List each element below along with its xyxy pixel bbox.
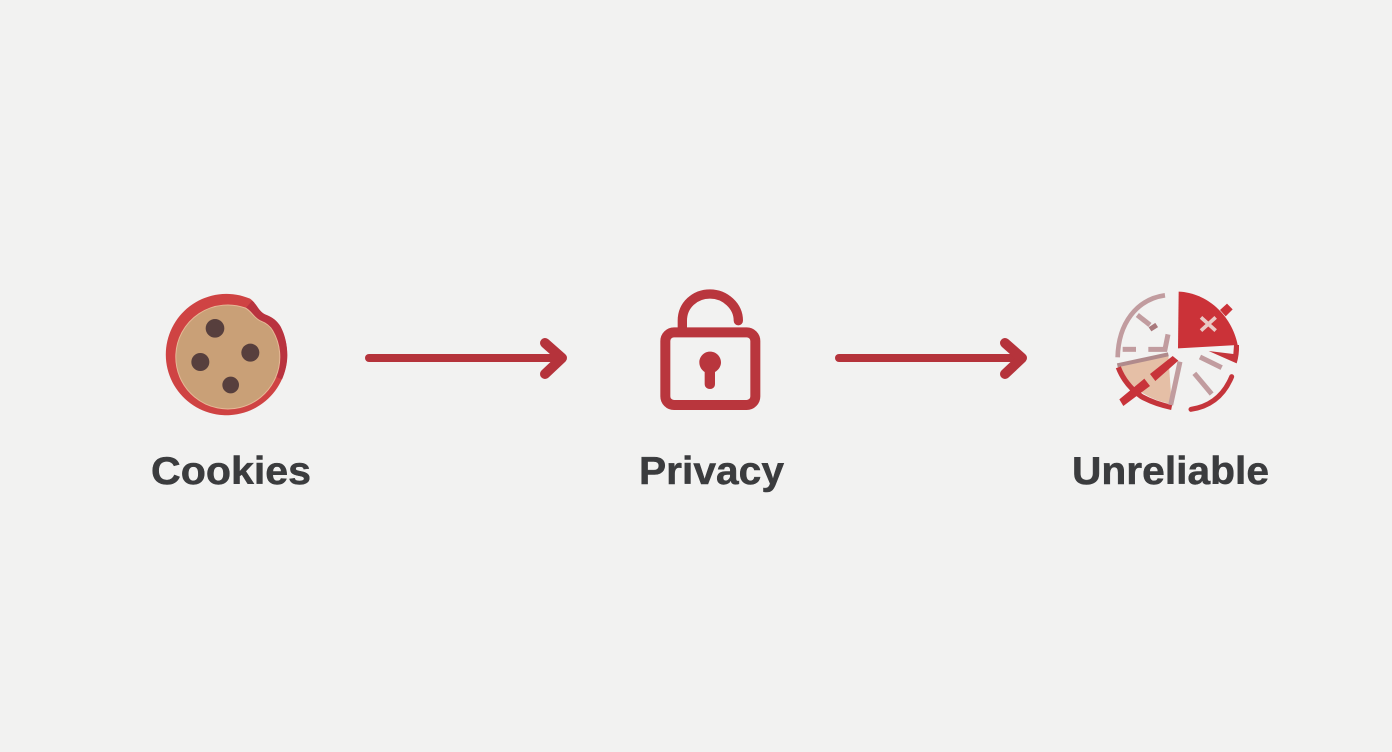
- outer arc bottom right: [1191, 377, 1232, 409]
- chocolate chip 3: [191, 353, 209, 371]
- lock shackle: [682, 294, 738, 327]
- icon: padlock: [665, 294, 755, 405]
- chocolate chip 1: [206, 319, 224, 338]
- peach slice: [1117, 354, 1180, 407]
- outer arc top left: [1118, 295, 1165, 357]
- arrow: privacy to unreliable: [839, 343, 1022, 374]
- chocolate chip 4: [222, 377, 239, 393]
- chocolate chip 2: [241, 344, 259, 362]
- right slice fragment: [1209, 345, 1239, 363]
- icon: broken pie chart: [1117, 292, 1239, 409]
- diagonal crack: upper segment: [1150, 356, 1178, 381]
- diagonal crack: lower segment: [1119, 379, 1150, 406]
- lock body: [665, 332, 755, 405]
- icon: cookie: [166, 294, 287, 415]
- broken red slice with x: [1178, 292, 1238, 348]
- keyhole: [699, 352, 721, 389]
- label: Cookies: Cookies: [151, 450, 311, 493]
- label: Unreliable: Unreliable: [1072, 450, 1269, 493]
- arrow: cookies to privacy: [369, 343, 562, 374]
- label: Privacy: Privacy: [639, 450, 784, 493]
- fragment dashes: [1123, 315, 1222, 394]
